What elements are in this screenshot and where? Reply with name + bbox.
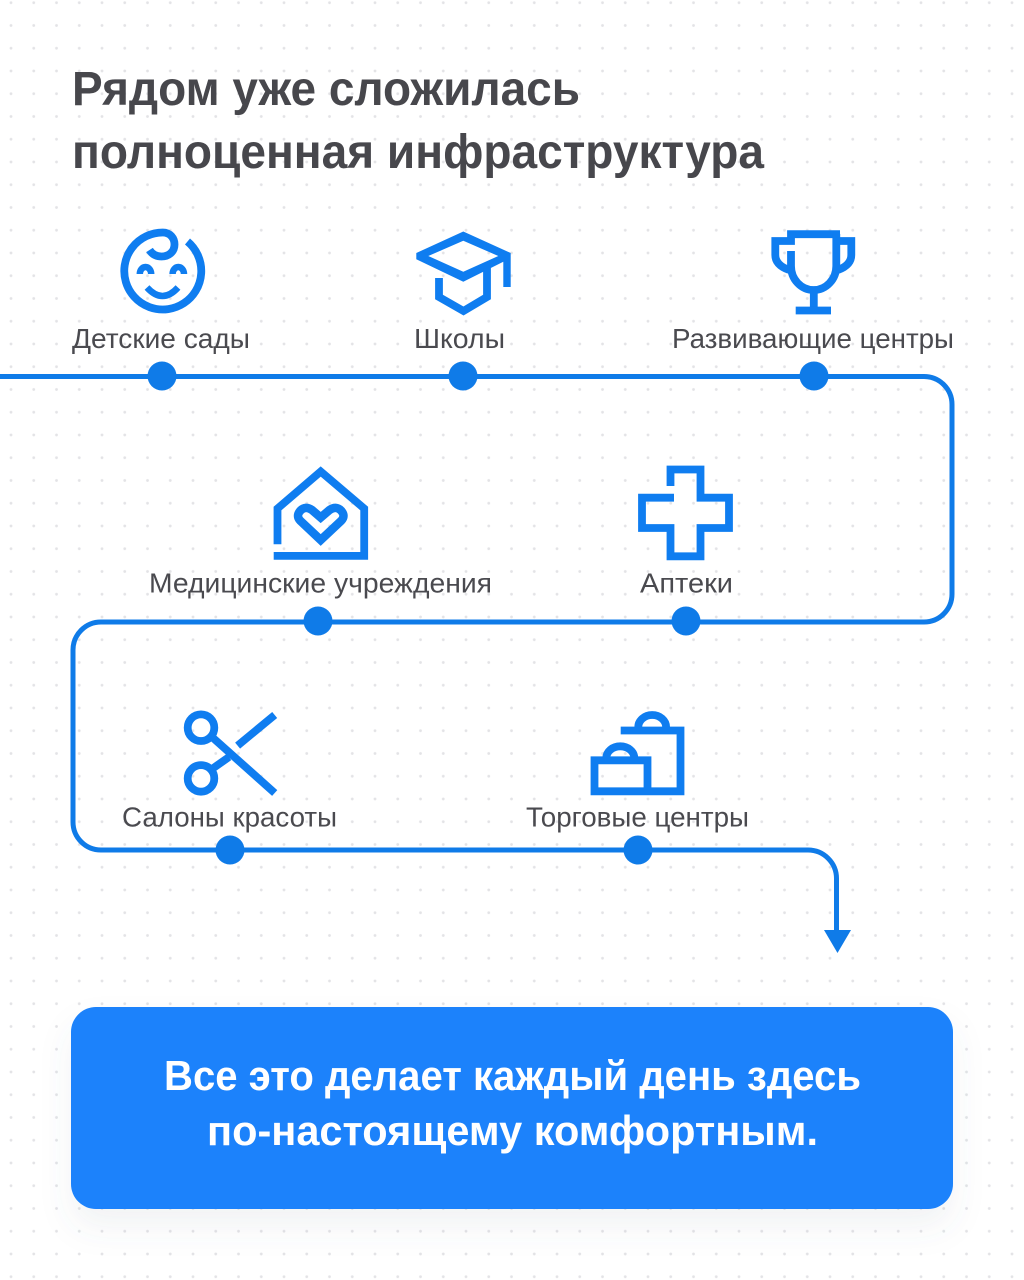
- item: medical institutions: [149, 472, 492, 636]
- node: [304, 606, 332, 636]
- node: [624, 836, 652, 864]
- label: Детские сады: [72, 323, 250, 354]
- icon: scissors: [188, 714, 275, 793]
- callout text: [164, 1052, 861, 1154]
- callout: conclusion box: [71, 1007, 953, 1209]
- item: development centers: [672, 234, 954, 390]
- node: [800, 362, 828, 390]
- item: kindergartens: [72, 232, 250, 390]
- icon: shopping bags: [594, 715, 680, 791]
- node: [672, 606, 700, 636]
- item: shopping centers: [526, 715, 749, 864]
- icon: baby face: [124, 232, 201, 309]
- icon: trophy: [775, 234, 851, 310]
- route line with arrow: [0, 376, 952, 953]
- node: [148, 362, 176, 390]
- icon: house with heart: [274, 472, 364, 556]
- item: beauty salons: [122, 714, 337, 864]
- item: schools: [414, 232, 511, 390]
- label: Развивающие центры: [672, 323, 954, 354]
- node: [216, 836, 244, 864]
- label: Торговые центры: [526, 802, 749, 832]
- arrow head: [824, 930, 851, 953]
- label: Школы: [414, 323, 505, 354]
- callout text: по-настоящему комфортным.: [207, 1107, 818, 1154]
- title: полноценная инфраструктура: [72, 126, 764, 179]
- label: Медицинские учреждения: [149, 568, 492, 598]
- callout text: Все это делает каждый день здесь: [164, 1052, 861, 1099]
- title: [72, 63, 764, 179]
- item: pharmacies: [640, 470, 733, 636]
- icon: graduation cap: [416, 232, 511, 311]
- label: Салоны красоты: [122, 802, 337, 832]
- title: Рядом уже сложилась: [72, 63, 580, 116]
- node: [448, 362, 478, 390]
- label: Аптеки: [640, 568, 733, 598]
- icon: medical cross: [642, 470, 729, 556]
